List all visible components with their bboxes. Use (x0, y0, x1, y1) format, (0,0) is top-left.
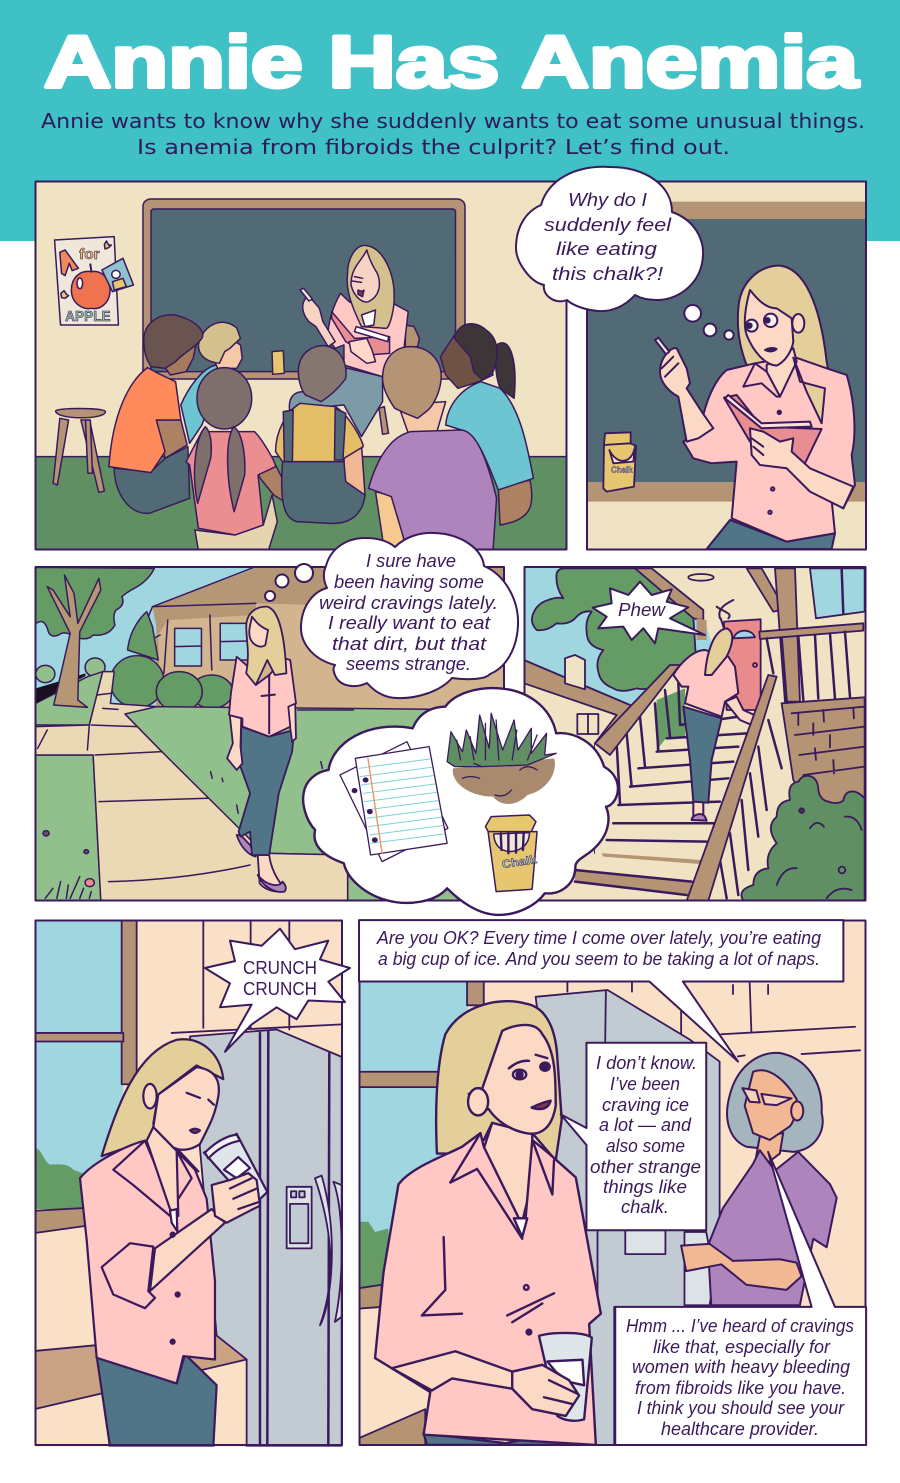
sidewalk (36, 672, 348, 901)
speech box: I don't know: other strange (590, 1157, 701, 1177)
Annie talking (375, 1001, 601, 1445)
speech box: I don't know: a lot — and (599, 1115, 692, 1135)
sound effect: Phew (593, 582, 705, 643)
header band (0, 0, 900, 241)
speech box: cravings and fibroids: women with heavy bleeding (632, 1357, 850, 1377)
icon: chalk box: Chalk (501, 853, 538, 871)
chalkboard (143, 199, 465, 379)
speech box: I don't know: I don’t know. (596, 1053, 697, 1073)
panel: teacher close-up (587, 181, 867, 550)
title: Annie Has Anemia (44, 22, 860, 103)
chalk box (603, 432, 636, 492)
panel: kitchen conversation (359, 920, 866, 1445)
thought bubble: weird cravings: I sure have (366, 551, 456, 571)
Annie drinking (80, 1039, 267, 1447)
thought bubble: why chalk: this chalk?! (552, 264, 663, 284)
friend with gray hair (681, 1053, 837, 1305)
speech box: I don't know: things like (603, 1177, 687, 1197)
railing (687, 675, 777, 901)
child in teal shirt, ponytail (440, 324, 533, 525)
icon: grass and dirt (447, 713, 556, 804)
child in purple shirt (369, 347, 497, 550)
thought bubble: why chalk: Why do I (568, 190, 647, 210)
icon: notebook paper (340, 742, 448, 862)
poster: A for apple: for (79, 246, 100, 263)
panel: classroom (35, 181, 567, 550)
poster: A for apple (55, 237, 133, 325)
child in teal shirt, blonde (181, 322, 242, 443)
speech box: I don't know: also some (606, 1136, 685, 1156)
speech box: I don't know: craving ice (602, 1095, 689, 1115)
speech box: cravings and fibroids: I think you should see your (637, 1398, 845, 1418)
speech box: I don't know: I’ve been (610, 1074, 680, 1094)
speech box: cravings and fibroids: from fibroids like you have. (635, 1378, 846, 1398)
speech box: are you OK (359, 920, 843, 1062)
speech box: cravings and fibroids: like that, especially for (653, 1337, 831, 1357)
speech box: I don't know: chalk. (621, 1197, 669, 1217)
thought bubble: weird cravings: that dirt, but that (332, 634, 487, 654)
teacher (655, 266, 855, 549)
lawns (36, 670, 458, 900)
poster: A for apple: APPLE (65, 308, 111, 325)
panel: kitchen, crunching ice (35, 920, 343, 1447)
thought bubble: weird cravings: seems strange. (346, 654, 471, 674)
subtitle: Is anemia from fibroids the culprit? Let’s find out. (137, 135, 730, 159)
food thought bubble (303, 688, 618, 915)
sound effect: crunch crunch: CRUNCH (243, 958, 317, 978)
thought bubble: weird cravings: been having some (334, 572, 484, 592)
icon: chalk box (485, 815, 538, 892)
stool (53, 409, 105, 492)
window (35, 920, 137, 1233)
window (359, 981, 484, 1445)
bush (741, 776, 865, 901)
refrigerator (190, 1030, 342, 1447)
chalk box: Chalk (611, 465, 633, 474)
thought bubble: weird cravings (265, 533, 518, 698)
Annie from behind (673, 600, 762, 821)
subtitle: Annie wants to know why she suddenly wants to eat some unusual things. (41, 109, 865, 133)
sound effect: crunch crunch: CRUNCH (243, 979, 317, 999)
speech box: cravings and fibroids (615, 1152, 866, 1445)
tree (532, 568, 697, 691)
neighbouring house (526, 654, 631, 900)
subtitle (41, 109, 865, 159)
teacher (289, 245, 419, 437)
sound effect: crunch crunch (205, 929, 350, 1052)
child in overalls (276, 346, 365, 523)
refrigerator (536, 990, 720, 1445)
house (135, 567, 504, 710)
panel: climbing the stairs (524, 567, 866, 901)
thought bubble: why chalk: suddenly feel (544, 215, 672, 235)
thought dots (684, 305, 734, 340)
cabinets and counter (35, 920, 342, 1409)
speech box: cravings and fibroids: Hmm ... I’ve heard of cravings (626, 1316, 854, 1336)
thought bubble: why chalk: like eating (556, 239, 657, 259)
tree and shrubs (36, 567, 233, 712)
speech box: cravings and fibroids: healthcare provider. (661, 1419, 819, 1439)
thought bubble: weird cravings: weird cravings lately. (319, 593, 498, 613)
chalk box on tray (272, 351, 284, 374)
tree trunk (47, 575, 101, 707)
Annie walking (227, 607, 296, 892)
child in orange shirt (109, 315, 203, 513)
sound effect: Phew: Phew (618, 600, 666, 620)
panel: walking outside (36, 567, 505, 901)
thought bubble: why chalk (516, 167, 703, 311)
porch wall and stairs (557, 568, 865, 901)
grass and flowers (43, 710, 353, 898)
thought bubble: weird cravings: I really want to eat (328, 613, 491, 633)
speech box: are you OK: a big cup of ice. And you seem to be taking a lot of naps. (378, 949, 820, 969)
child in pink shirt with pigtails (186, 368, 289, 550)
speech box: are you OK: Are you OK? Every time I come over lately, you’re eating (376, 928, 821, 948)
speech box: I don't know (561, 1043, 706, 1230)
cabinets (567, 981, 860, 1056)
